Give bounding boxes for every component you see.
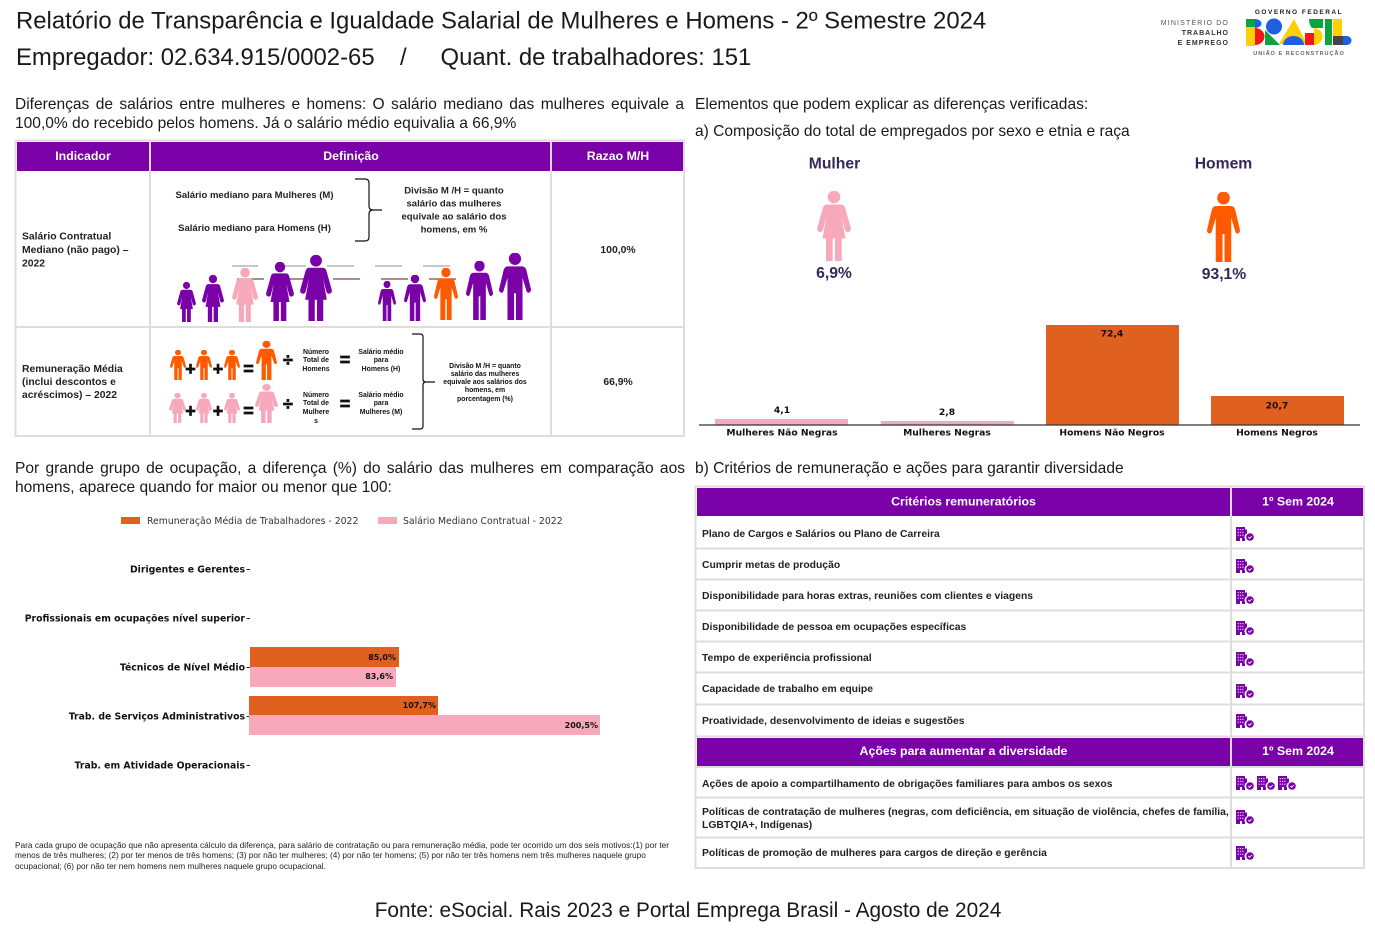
definição mediana: texto: Salário mediano para Homens (H) <box>178 223 331 234</box>
panel: tabela indicadores <box>16 140 684 436</box>
gráfico de barras: sexo e raça: 4,1 <box>774 405 790 416</box>
logo: ministério do trabalho: MINISTÉRIO DO <box>1161 18 1229 27</box>
fórmula homens: + <box>185 359 196 379</box>
linhas de ações: Políticas de promoção de mulheres para cargos de direção e gerência <box>702 848 1047 859</box>
gráfico de barras: sexo e raça <box>699 325 1360 438</box>
table header: definição <box>151 142 550 171</box>
title: Empregador: 02.634.915/0002-65 <box>16 44 375 71</box>
linhas de critérios: Capacidade de trabalho em equipe <box>702 684 873 695</box>
table header: razão: Razao M/H <box>587 149 649 163</box>
gráfico de barras: ocupação <box>25 564 600 772</box>
ícones: critérios <box>1236 527 1254 728</box>
valor 66,9%: 66,9% <box>603 377 633 388</box>
row label: salário contratual: Mediano (não pago) – <box>22 245 129 256</box>
cabeçalho: 1º sem 2024 ações <box>1232 738 1363 766</box>
row label: remuneração média: Remuneração Média <box>22 364 123 375</box>
linhas de critérios: Disponibilidade para horas extras, reuniões com clientes e viagens <box>702 591 1033 602</box>
definição média: texto <box>443 363 527 403</box>
fórmula homens: ÷ <box>283 350 293 370</box>
gráfico de barras: sexo e raça: 20,7 <box>1266 400 1288 412</box>
rótulo mulher: Mulher <box>809 156 860 172</box>
gráfico de barras: ocupação: Trab. em Atividade Operacionais <box>75 760 245 772</box>
chave mediana <box>355 179 382 241</box>
rótulo homem: Homem <box>1195 156 1252 172</box>
cabeçalho: 1º sem 2024 <box>1232 488 1363 516</box>
fórmula homens <box>170 341 350 380</box>
chave média <box>412 334 435 429</box>
title <box>16 8 986 71</box>
row label: salário contratual: 2022 <box>22 258 45 270</box>
definição mediana: texto: Divisão M /H = quanto <box>404 186 504 196</box>
fórmula mulheres: texto: para <box>374 400 388 407</box>
definição média: texto: salário das mulheres <box>451 371 519 378</box>
row label: remuneração média: (inclui descontos e <box>22 377 116 388</box>
gráfico de barras: ocupação: 83,6% <box>365 672 393 681</box>
linhas de critérios: Cumprir metas de produção <box>702 560 840 571</box>
fórmula mulheres: texto <box>303 392 404 425</box>
logo: ministério do trabalho <box>1161 18 1229 47</box>
linhas de critérios <box>702 529 1033 727</box>
linhas de ações: Políticas de contratação de mulheres (negras, com deficiência, em situação de violência, chefes de família, <box>702 807 1229 818</box>
cabeçalho: ações: Ações para aumentar a diversidade <box>860 744 1068 758</box>
pictograma: mulheres ordenadas <box>177 255 332 322</box>
logo: governo federal brasil: GOVERNO FEDERAL <box>1255 9 1343 16</box>
definição mediana: texto: equivale ao salário dos <box>401 212 507 222</box>
fórmula homens: texto: Total de <box>303 357 329 364</box>
logo: ministério do trabalho: TRABALHO <box>1182 30 1229 37</box>
fórmula homens: texto: Homens (H) <box>362 366 400 373</box>
gráfico de barras: ocupação: Dirigentes e Gerentes <box>130 564 245 576</box>
panel: critérios e ações <box>696 486 1364 868</box>
texto: diferenças de salários: 100,0% do recebido pelos homens. Já o salário médio equivalia a 66,9% <box>15 115 516 132</box>
fórmula mulheres: + <box>185 401 196 421</box>
fórmula mulheres: = <box>243 401 254 421</box>
row label: salário contratual: Salário Contratual <box>22 232 111 242</box>
table header: razão <box>552 142 683 171</box>
ícones: ações <box>1236 776 1296 860</box>
texto: grande grupo de ocupação: homens, aparece quando for maior ou menor que 100: <box>15 479 392 496</box>
table header: indicador <box>17 142 149 171</box>
gráfico de barras: sexo e raça: Mulheres Não Negras <box>726 428 838 438</box>
fórmula mulheres: ÷ <box>283 394 293 414</box>
gráfico de barras: sexo e raça: 72,4 <box>1101 328 1123 340</box>
gráfico de barras: ocupação: Profissionais em ocupações nível superior <box>25 614 245 624</box>
row label: remuneração média <box>22 364 123 401</box>
fonte: Fonte: eSocial. Rais 2023 e Portal Emprega Brasil - Agosto de 2024 <box>375 899 1001 922</box>
texto: diferenças de salários <box>15 96 684 132</box>
legenda do gráfico por ocupação: Remuneração Média de Trabalhadores - 2022 <box>147 516 358 527</box>
fórmula mulheres: texto: Número <box>303 392 329 399</box>
fórmula mulheres: + <box>213 401 223 421</box>
logo: governo federal brasil <box>1246 9 1352 57</box>
gráfico de barras: ocupação: 85,0% <box>368 653 396 662</box>
gráfico de barras: sexo e raça: 2,8 <box>939 407 955 418</box>
nota de rodapé do gráfico: menos de três mulheres; (2) por ter menos de três homens; (3) por não ter mulheres; (4) por não ter homens; (5) por não ter três homens nem três mulheres naquele grupo <box>15 850 646 860</box>
fórmula mulheres: texto: Mulheres (M) <box>360 409 402 416</box>
ícone: homem <box>1207 192 1240 262</box>
legenda do gráfico por ocupação: Salário Mediano Contratual - 2022 <box>403 516 563 527</box>
fórmula homens: texto: Salário médio <box>358 349 404 356</box>
logo: ministério do trabalho: E EMPREGO <box>1178 40 1229 47</box>
fórmula mulheres: texto: s <box>314 418 318 425</box>
cabeçalho: critérios remuneratórios <box>697 488 1230 516</box>
linhas de ações: Ações de apoio a compartilhamento de obrigações familiares para ambos os sexos <box>702 779 1113 790</box>
fórmula homens: texto <box>302 349 404 373</box>
fórmula mulheres: texto: Salário médio <box>358 392 404 399</box>
title: Relatório de Transparência e Igualdade Salarial de Mulheres e Homens - 2º Semestre 2024 <box>16 8 986 34</box>
linhas de critérios: Plano de Cargos e Salários ou Plano de Carreira <box>702 529 940 540</box>
nota de rodapé do gráfico <box>15 840 669 871</box>
definição média: texto: homens, em <box>465 387 505 394</box>
cabeçalho: ações <box>697 738 1230 766</box>
linhas de mediana <box>232 266 456 279</box>
row label: salário contratual <box>22 232 129 270</box>
gráfico de barras: ocupação: 107,7% <box>403 701 436 710</box>
linhas de ações: LGBTQIA+, Indígenas) <box>702 820 812 831</box>
gráfico de barras: ocupação: 200,5% <box>565 721 598 730</box>
ícone: mulher <box>817 191 851 261</box>
linhas de critérios: Tempo de experiência profissional <box>702 653 872 664</box>
valor 100,0%: 100,0% <box>600 245 636 256</box>
percentual mulher: 6,9% <box>816 265 852 282</box>
title: Quant. de trabalhadores: 151 <box>440 44 751 71</box>
fórmula mulheres <box>169 384 350 423</box>
nota de rodapé do gráfico: Para cada grupo de ocupação que não apresenta cálculo da diferença, para salário de contratação ou para remuneração média, pode ter ocorrido um dos seis motivos:(1) por ter <box>15 840 669 850</box>
panel: composição por sexo <box>809 156 1252 283</box>
legenda do gráfico por ocupação <box>121 516 563 527</box>
fórmula mulheres: texto: Mulhere <box>303 409 329 416</box>
table header: indicador: Indicador <box>55 149 111 163</box>
fórmula homens: texto: Homens <box>302 366 330 373</box>
texto: grande grupo de ocupação: Por grande grupo de ocupação, a diferença (%) do salário das mulheres em comparação aos <box>15 460 685 477</box>
definição média: texto: equivale aos salários dos <box>443 379 527 386</box>
fórmula mulheres: texto: Total de <box>303 400 329 407</box>
row label: remuneração média: acréscimos) – 2022 <box>22 390 117 401</box>
fórmula homens: = <box>243 359 254 379</box>
nota de rodapé do gráfico: ocupacional; (6) por não ter nem homens nem mulheres naquele grupo ocupacional. <box>15 861 326 871</box>
fórmula homens: texto: Número <box>303 349 329 356</box>
gráfico de barras: sexo e raça: Mulheres Negras <box>903 428 991 438</box>
definição média: texto: porcentagem (%) <box>457 396 513 403</box>
title: / <box>400 44 407 71</box>
table header: definição: Definição <box>323 149 379 163</box>
percentual homem: 93,1% <box>1202 266 1246 283</box>
gráfico de barras: ocupação: Trab. de Serviços Administrativos <box>69 712 245 722</box>
gráfico de barras: sexo e raça: Homens Negros <box>1236 428 1318 438</box>
gráfico de barras: ocupação: Técnicos de Nível Médio <box>120 662 245 674</box>
definição mediana: texto: homens, em % <box>421 224 488 236</box>
definição mediana: texto: salário das mulheres <box>407 198 501 210</box>
definição mediana: texto: Salário mediano para Mulheres (M) <box>175 190 334 201</box>
fórmula homens: texto: para <box>374 357 388 364</box>
definição média: texto: Divisão M /H = quanto <box>449 363 521 370</box>
gráfico de barras: sexo e raça: Homens Não Negros <box>1059 428 1165 438</box>
definição mediana: texto <box>175 186 507 236</box>
texto: diferenças de salários: Diferenças de salários entre mulheres e homens: O salário mediano das mulheres equivale a <box>15 96 684 113</box>
subtítulo a: a) Composição do total de empregados por sexo e etnia e raça <box>695 123 1130 140</box>
subtítulo b: b) Critérios de remuneração e ações para garantir diversidade <box>695 460 1124 477</box>
pictograma: homens ordenados <box>378 253 531 321</box>
linhas de critérios: Proatividade, desenvolvimento de ideias e sugestões <box>702 716 965 727</box>
texto: elementos explicativos: Elementos que podem explicar as diferenças verificadas: <box>695 96 1088 113</box>
linhas de critérios: Disponibilidade de pessoa em ocupações específicas <box>702 622 966 633</box>
fórmula mulheres: = <box>340 394 350 414</box>
cabeçalho: 1º sem 2024: 1º Sem 2024 <box>1262 494 1334 508</box>
cabeçalho: 1º sem 2024 ações: 1º Sem 2024 <box>1262 744 1334 758</box>
logo: governo federal brasil: UNIÃO E RECONSTRUÇÃO <box>1253 50 1345 57</box>
texto: grande grupo de ocupação <box>15 460 685 496</box>
fórmula homens: = <box>340 350 350 370</box>
linhas de ações <box>702 779 1229 859</box>
fórmula homens: + <box>213 359 223 379</box>
cabeçalho: critérios remuneratórios: Critérios remuneratórios <box>891 494 1036 508</box>
